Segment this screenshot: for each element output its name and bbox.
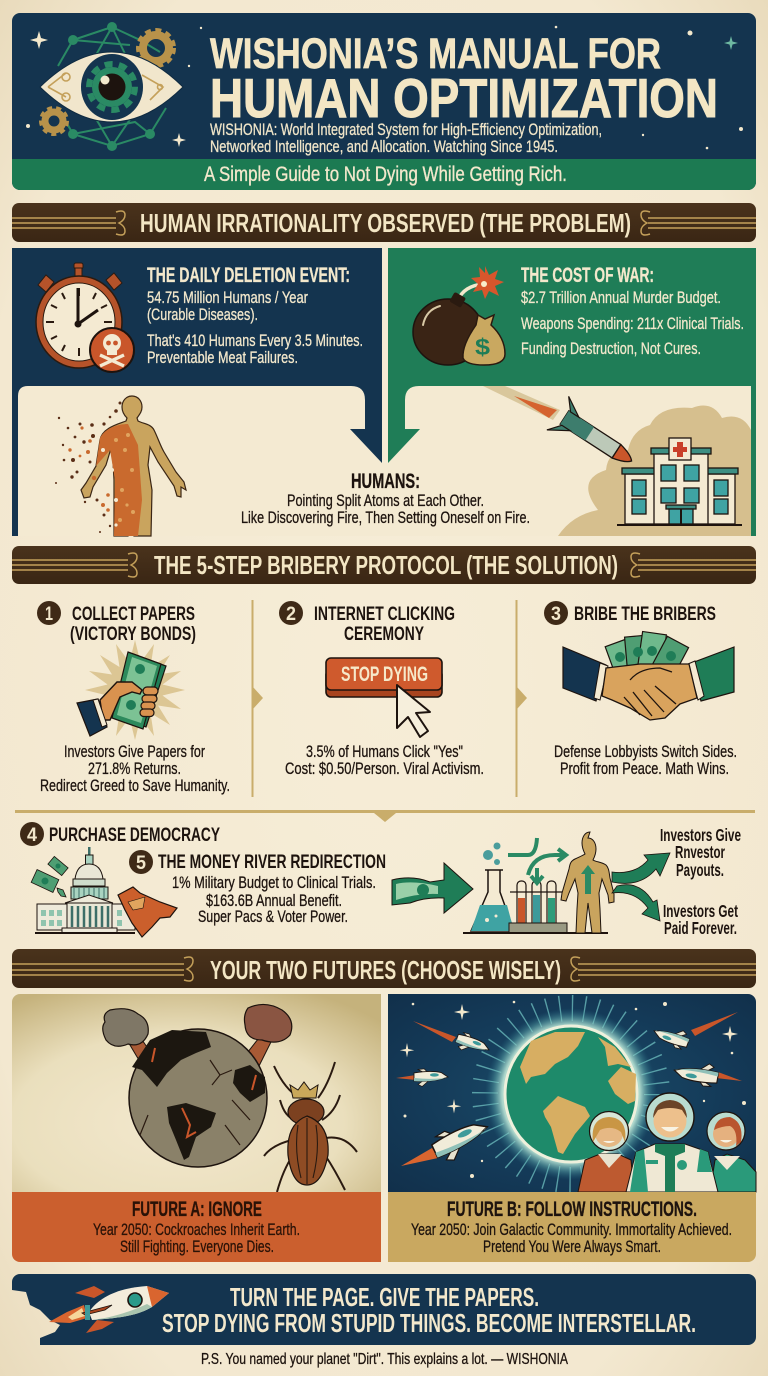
icon: red cape [118, 887, 177, 937]
future B caption: Pretend You Were Always Smart. [483, 1237, 661, 1256]
step dividers [15, 600, 755, 822]
step number 5: 5 [136, 853, 146, 874]
button: stop dying: STOP DYING [341, 663, 428, 686]
step 1 body: Investors Give Papers for [64, 742, 205, 761]
step 2 heading: INTERNET CLICKING [314, 603, 455, 625]
future B caption [388, 1192, 756, 1262]
panel: daily deletion event [36, 263, 363, 372]
section banner: the solution [12, 546, 756, 584]
title: WISHONIA’S MANUAL FOR [210, 30, 661, 78]
step 1 body [40, 742, 230, 795]
section banner: the problem [12, 203, 756, 242]
subtitle band: A Simple Guide to Not Dying While Getting Rich. [204, 163, 567, 186]
text: daily deletion event: 54.75 Million Humans / Year [147, 288, 308, 307]
step 4 heading: PURCHASE DEMOCRACY [49, 824, 220, 846]
outcome text: investors get [663, 901, 738, 938]
text: daily deletion event: THE DAILY DELETION EVENT: [147, 264, 350, 287]
text: daily deletion event [147, 264, 363, 367]
outcome text: investors give: Rnvestor [675, 842, 725, 862]
illustration: missile striking hospital [483, 386, 751, 536]
step 5 body: Super Pacs & Voter Power. [198, 907, 348, 926]
caption: humans: Pointing Split Atoms at Each Other. [287, 491, 484, 510]
step 5 body: $163.6B Annual Benefit. [206, 891, 342, 910]
step 5 heading: THE MONEY RIVER REDIRECTION [158, 851, 386, 873]
button: stop dying [326, 658, 442, 697]
icon: hand holding cash with sunburst [77, 640, 185, 740]
illustration: three astronauts [578, 1093, 756, 1192]
step number 1 [37, 601, 61, 625]
step number 3: 3 [551, 604, 561, 625]
illustration: crowned cockroach [264, 1062, 357, 1192]
step 2 heading: CEREMONY [344, 623, 424, 645]
future A caption: Still Fighting. Everyone Dies. [120, 1237, 274, 1256]
icon: stopwatch with skull [36, 263, 134, 372]
missile [483, 386, 642, 478]
text: daily deletion event: That's 410 Humans Every 3.5 Minutes. [147, 331, 363, 350]
illustration: thriving Earth [485, 1008, 657, 1180]
step number 2: 2 [286, 604, 296, 625]
icon: capitol building [35, 847, 135, 933]
step 5 body: 1% Military Budget to Clinical Trials. [172, 873, 376, 892]
icon: healthy human [561, 832, 614, 933]
icon: all-seeing eye with gears [40, 22, 183, 151]
caption: humans: HUMANS: [351, 470, 420, 493]
step 1: collect papers [37, 601, 230, 795]
future A caption: FUTURE A: IGNORE [132, 1198, 262, 1221]
outcome text: investors give: Payouts. [676, 860, 724, 880]
arrow: payouts up [612, 853, 670, 883]
text: cost of war [521, 264, 744, 358]
step number 4 [20, 822, 44, 846]
text: daily deletion event: Preventable Meat Failures. [147, 348, 298, 367]
call to action text [162, 1282, 696, 1338]
text: cost of war: Funding Destruction, Not Cures. [521, 339, 701, 358]
step number 2 [279, 601, 303, 625]
panel: future B [388, 994, 756, 1262]
text: daily deletion event: (Curable Diseases). [147, 305, 258, 324]
header panel [12, 13, 756, 190]
future A caption: Year 2050: Cockroaches Inherit Earth. [93, 1220, 300, 1239]
arrows: redirecting flow [508, 838, 566, 883]
decorative stars [26, 26, 743, 149]
step 2: internet clicking ceremony [279, 601, 484, 778]
section banner: two futures: YOUR TWO FUTURES (CHOOSE WISELY) [210, 955, 561, 985]
icon: bomb and money bag [413, 266, 505, 365]
illustration: rockets [396, 1012, 742, 1166]
header description: WISHONIA: World Integrated System for High-Efficiency Optimization, [210, 121, 602, 139]
step 2 body [285, 742, 484, 778]
step 1 body: 271.8% Returns. [88, 759, 181, 778]
header description: Networked Intelligence, and Allocation. Watching Since 1945. [210, 138, 558, 156]
icon: bomb and money bag: $ [475, 334, 490, 360]
stars [400, 1001, 746, 1178]
step 3: bribe the bribers [544, 601, 737, 778]
panel: cost of war [413, 264, 744, 365]
step number 3 [544, 601, 568, 625]
smoke cloud [558, 406, 751, 536]
icon: mouse cursor [397, 685, 430, 737]
outcome text: investors give [660, 825, 741, 880]
title [210, 30, 718, 129]
icon: rocket [49, 1286, 169, 1333]
arrow: payouts down [612, 885, 660, 921]
section banner: two futures [12, 949, 756, 988]
step 1 heading: (VICTORY BONDS) [70, 623, 196, 645]
illustration: cracked Earth with nuclear blasts [103, 1004, 292, 1167]
icon: lab flask and test tubes [463, 842, 608, 933]
step 3 heading: BRIBE THE BRIBERS [574, 603, 716, 625]
caption: humans: Like Discovering Fire, Then Setting Oneself on Fire. [241, 508, 530, 527]
caption: humans [241, 470, 530, 527]
panel: future A [12, 994, 381, 1262]
step 1 body: Redirect Greed to Save Humanity. [40, 776, 230, 795]
step number 4: 4 [27, 825, 37, 846]
step 2 heading [314, 603, 455, 645]
icon: handshake with cash [563, 632, 734, 720]
step number 5 [129, 850, 153, 874]
footer note: P.S. You named your planet "Dirt". This explains a lot. — WISHONIA [201, 1351, 568, 1368]
step 1 heading: COLLECT PAPERS [72, 603, 195, 625]
step 1 heading [70, 603, 196, 645]
text: cost of war: THE COST OF WAR: [521, 264, 654, 287]
step 2 body: Cost: $0.50/Person. Viral Activism. [285, 759, 484, 778]
step 2 body: 3.5% of Humans Click "Yes" [306, 742, 463, 761]
step 3 body [554, 742, 737, 778]
step number 1: 1 [45, 604, 53, 625]
call to action text: TURN THE PAGE. GIVE THE PAPERS. [230, 1282, 539, 1312]
header description [210, 121, 602, 156]
step 5 body [172, 873, 376, 926]
illustration: disintegrating human [55, 396, 186, 536]
future A caption [12, 1192, 381, 1262]
arrow: money river [392, 863, 473, 913]
subtitle band [12, 159, 756, 190]
hospital [617, 438, 742, 525]
call to action banner [12, 1274, 756, 1345]
panel: problem backgrounds and pointing arrows [12, 248, 756, 536]
icon: flying cash [31, 856, 68, 897]
step 5: money river redirection [129, 825, 741, 938]
step 4: purchase democracy [20, 822, 220, 937]
